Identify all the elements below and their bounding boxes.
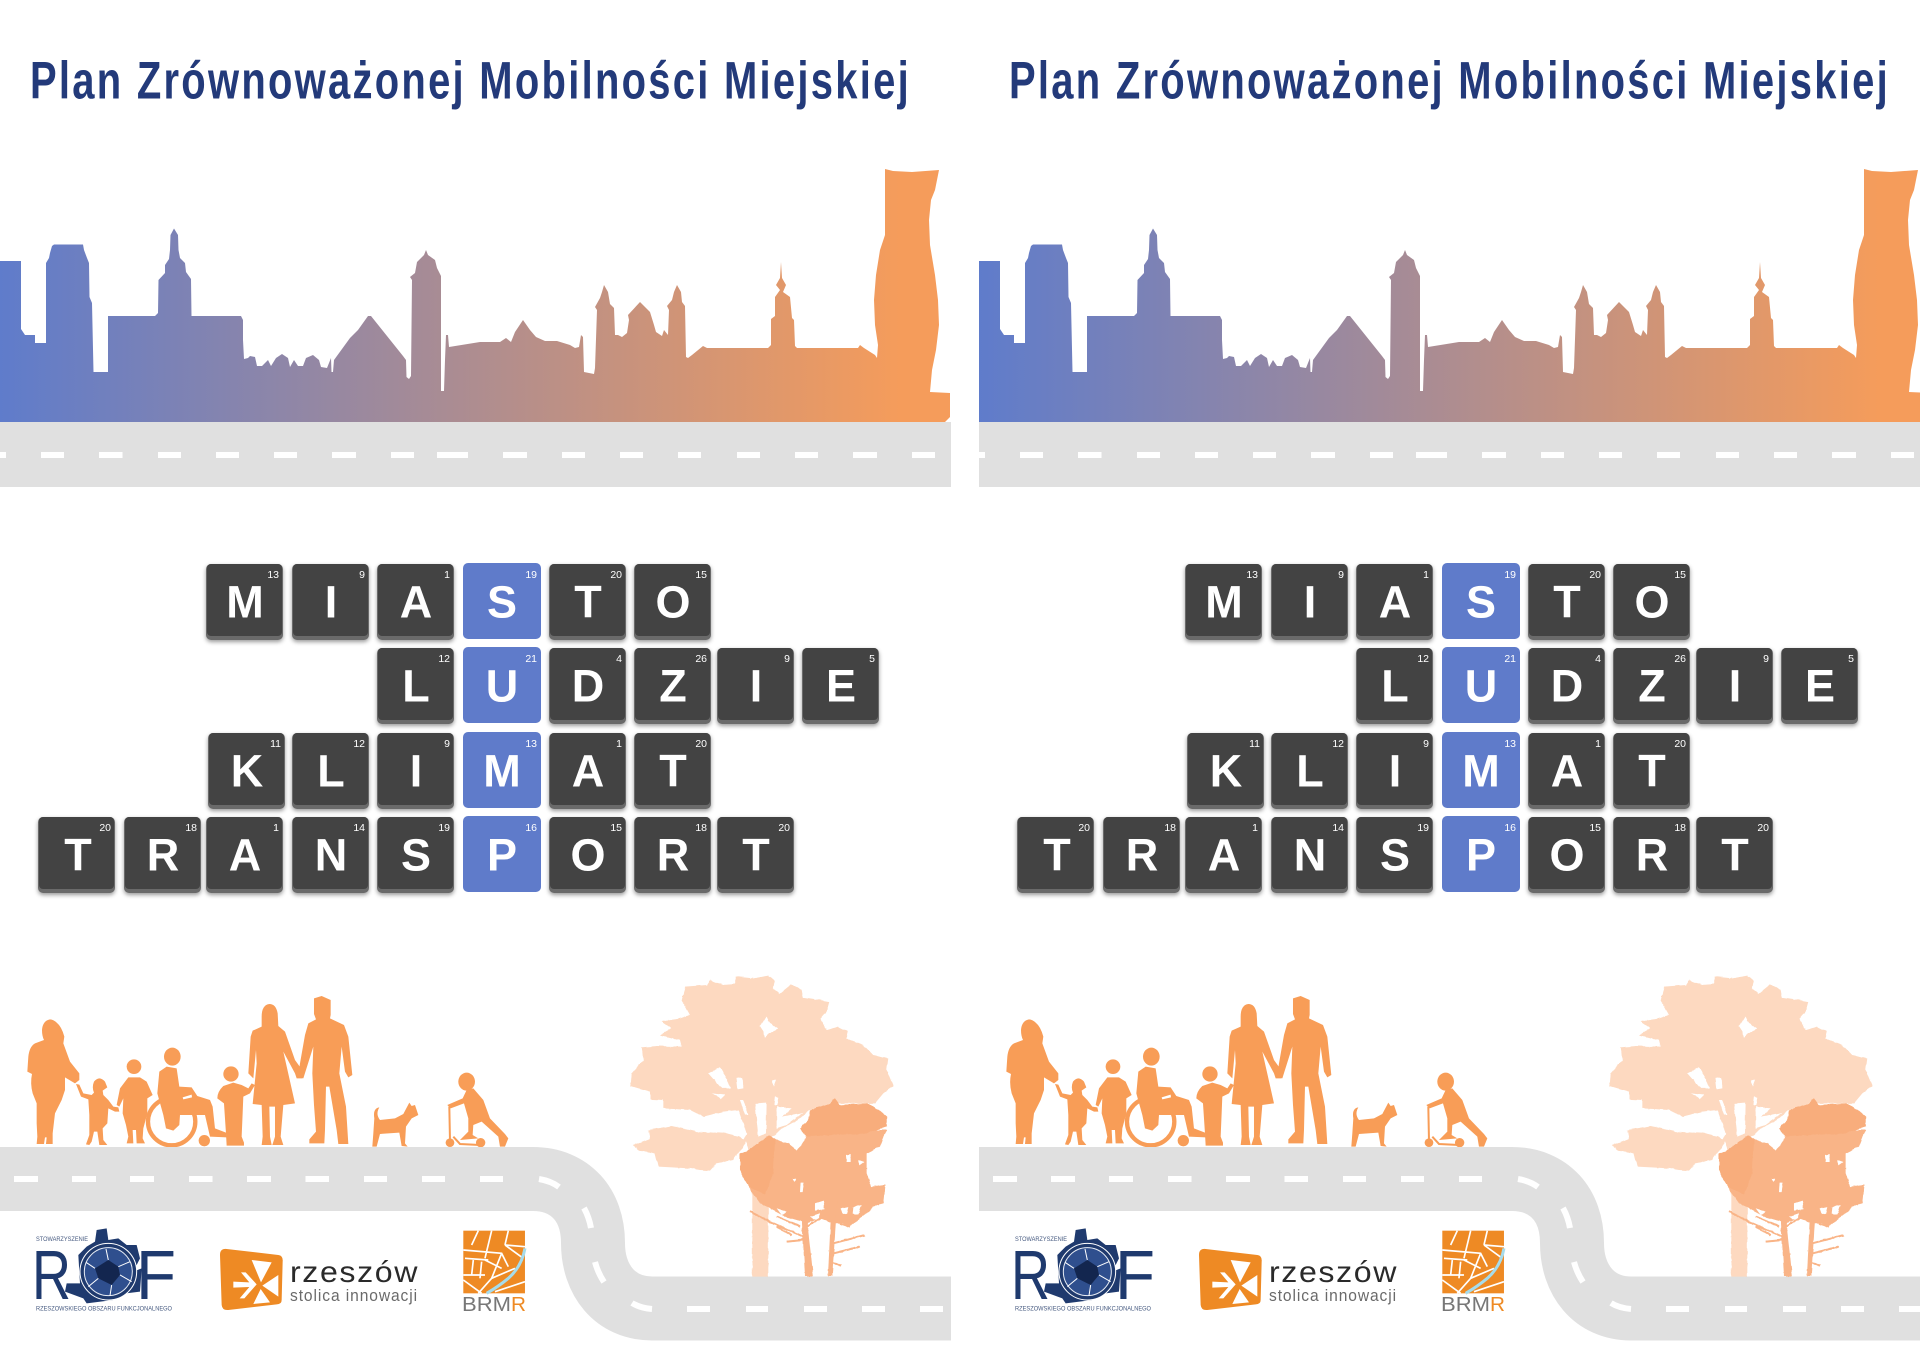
word: LUDZIE: D <box>572 660 604 712</box>
word: MIASTO: M <box>226 576 264 628</box>
word tiles: SUMP crossword <box>38 563 879 893</box>
trees <box>631 976 893 1277</box>
people silhouettes <box>1006 996 1487 1147</box>
word: TRANSPORT: 18 <box>1164 822 1176 834</box>
upper road with dashes <box>0 422 951 487</box>
city skyline silhouette <box>0 169 950 422</box>
word: MIASTO: S <box>1466 576 1496 628</box>
word: MIASTO: 13 <box>267 569 279 581</box>
word: KLIMAT: 13 <box>525 738 537 750</box>
logo: ROF: STOWARZYSZENIE <box>36 1236 89 1243</box>
word: MIASTO: 15 <box>1674 569 1686 581</box>
title: Plan Zrównoważonej Mobilności Miejskiej <box>30 52 911 110</box>
word: KLIMAT: 11 <box>1249 738 1260 750</box>
word: MIASTO: 13 <box>1246 569 1258 581</box>
word: TRANSPORT: T <box>742 830 770 880</box>
word: KLIMAT: K <box>231 746 264 796</box>
word: MIASTO <box>206 563 711 640</box>
logo: ROF: STOWARZYSZENIE <box>1015 1236 1068 1243</box>
word: LUDZIE: 21 <box>525 653 537 665</box>
logo: ROF: F <box>136 1236 176 1314</box>
word: TRANSPORT: 18 <box>1674 822 1686 834</box>
word: MIASTO: I <box>1304 576 1316 628</box>
logo: ROF: R <box>1011 1236 1050 1314</box>
word: TRANSPORT: A <box>229 830 261 880</box>
word: LUDZIE <box>377 647 879 724</box>
logo: Rzeszów: rzeszów <box>290 1256 419 1289</box>
word: KLIMAT <box>1187 732 1690 809</box>
word: MIASTO: 20 <box>1589 569 1601 581</box>
word: KLIMAT: M <box>483 746 521 796</box>
logo: BRMR <box>462 1231 526 1316</box>
word: MIASTO: 15 <box>695 569 707 581</box>
logo: Rzeszów <box>220 1249 419 1310</box>
word: TRANSPORT: T <box>1043 830 1071 880</box>
word: TRANSPORT: R <box>1636 830 1668 880</box>
winding lower road <box>979 1176 1920 1312</box>
word: TRANSPORT: O <box>570 830 606 880</box>
word: TRANSPORT <box>38 816 794 893</box>
word: KLIMAT: 1 <box>616 738 622 750</box>
word: TRANSPORT: 20 <box>99 822 111 834</box>
word: MIASTO: 19 <box>525 569 537 581</box>
word: LUDZIE: E <box>1805 660 1835 712</box>
word: MIASTO: 19 <box>1504 569 1516 581</box>
word: MIASTO: 9 <box>1338 569 1344 581</box>
word: TRANSPORT: 16 <box>525 822 537 834</box>
word: KLIMAT: 1 <box>1595 738 1601 750</box>
logo: BRMR: R <box>511 1294 526 1316</box>
word: MIASTO: S <box>487 576 517 628</box>
word: KLIMAT: T <box>659 746 687 796</box>
word: LUDZIE: D <box>1551 660 1583 712</box>
word: TRANSPORT: 15 <box>610 822 622 834</box>
word: TRANSPORT: P <box>487 830 517 880</box>
panel: left leaflet <box>0 52 951 1316</box>
word: KLIMAT: I <box>410 746 422 796</box>
word: TRANSPORT: 20 <box>778 822 790 834</box>
word: TRANSPORT: T <box>64 830 92 880</box>
people silhouettes <box>27 996 508 1147</box>
word: TRANSPORT: 16 <box>1504 822 1516 834</box>
word: KLIMAT: I <box>1389 746 1401 796</box>
word: TRANSPORT: P <box>1466 830 1496 880</box>
word: KLIMAT: K <box>1210 746 1243 796</box>
trees <box>1610 976 1872 1277</box>
word: KLIMAT: 20 <box>1674 738 1686 750</box>
word: MIASTO: A <box>1379 576 1411 628</box>
word: LUDZIE: E <box>826 660 856 712</box>
panel: right leaflet <box>979 52 1920 1316</box>
word: TRANSPORT: R <box>657 830 689 880</box>
word: TRANSPORT: 18 <box>695 822 707 834</box>
word: TRANSPORT: 20 <box>1078 822 1090 834</box>
word: TRANSPORT: T <box>1721 830 1749 880</box>
word: LUDZIE: 4 <box>1595 653 1601 665</box>
word: MIASTO: 1 <box>444 569 450 581</box>
word: LUDZIE: U <box>1465 660 1497 712</box>
word: LUDZIE: 5 <box>1848 653 1854 665</box>
word: LUDZIE <box>1356 647 1858 724</box>
word: KLIMAT: 11 <box>270 738 281 750</box>
word: TRANSPORT: 1 <box>1252 822 1258 834</box>
word: LUDZIE: I <box>1729 660 1741 712</box>
word: TRANSPORT <box>1017 816 1773 893</box>
word: TRANSPORT: 14 <box>1332 822 1344 834</box>
word: KLIMAT: 20 <box>695 738 707 750</box>
word: LUDZIE: L <box>1381 660 1409 712</box>
logo: ROF: R <box>32 1236 71 1314</box>
word: KLIMAT <box>208 732 711 809</box>
logo: ROF: F <box>1115 1236 1155 1314</box>
word: TRANSPORT: S <box>1380 830 1410 880</box>
word: MIASTO: A <box>400 576 432 628</box>
word: TRANSPORT: R <box>147 830 179 880</box>
word: TRANSPORT: O <box>1549 830 1585 880</box>
word: KLIMAT: T <box>1638 746 1666 796</box>
word: TRANSPORT: 18 <box>185 822 197 834</box>
word: LUDZIE: 9 <box>784 653 790 665</box>
word: MIASTO: 9 <box>359 569 365 581</box>
logo: BRMR <box>1441 1231 1505 1316</box>
word: TRANSPORT: 15 <box>1589 822 1601 834</box>
word: KLIMAT: L <box>1296 746 1324 796</box>
word: MIASTO: M <box>1205 576 1243 628</box>
word: KLIMAT: A <box>1551 746 1583 796</box>
word: LUDZIE: 5 <box>869 653 875 665</box>
word: LUDZIE: Z <box>659 660 687 712</box>
word: LUDZIE: 26 <box>1674 653 1686 665</box>
logo: BRMR: BRM <box>1441 1294 1490 1316</box>
word: LUDZIE: 21 <box>1504 653 1516 665</box>
logo: ROF: RZESZOWSKIEGO OBSZARU FUNKCJONALNEGO <box>36 1306 172 1312</box>
city skyline silhouette <box>979 169 1920 422</box>
logo: ROF <box>1011 1228 1155 1314</box>
word: TRANSPORT: 19 <box>1417 822 1429 834</box>
word: TRANSPORT: 14 <box>353 822 365 834</box>
word: TRANSPORT: 20 <box>1757 822 1769 834</box>
word: LUDZIE: 4 <box>616 653 622 665</box>
word: TRANSPORT: N <box>315 830 347 880</box>
word: MIASTO: I <box>325 576 337 628</box>
logo: BRMR: BRM <box>462 1294 511 1316</box>
winding lower road <box>0 1176 951 1312</box>
word: TRANSPORT: A <box>1208 830 1240 880</box>
word: MIASTO: O <box>1634 576 1670 628</box>
word: TRANSPORT: 19 <box>438 822 450 834</box>
word: KLIMAT: L <box>317 746 345 796</box>
logo: BRMR: R <box>1490 1294 1505 1316</box>
word: MIASTO: 1 <box>1423 569 1429 581</box>
word: KLIMAT: 13 <box>1504 738 1516 750</box>
word: KLIMAT: 12 <box>353 738 365 750</box>
word: TRANSPORT: S <box>401 830 431 880</box>
upper road with dashes <box>979 422 1920 487</box>
logo: ROF <box>32 1228 176 1314</box>
word: KLIMAT: A <box>572 746 604 796</box>
word: MIASTO: 20 <box>610 569 622 581</box>
word: KLIMAT: 12 <box>1332 738 1344 750</box>
logo: Rzeszów <box>1199 1249 1398 1310</box>
word: KLIMAT: 9 <box>1423 738 1429 750</box>
word: MIASTO: O <box>655 576 691 628</box>
word: LUDZIE: 9 <box>1763 653 1769 665</box>
word: TRANSPORT: R <box>1126 830 1158 880</box>
word: LUDZIE: Z <box>1638 660 1666 712</box>
word: KLIMAT: 9 <box>444 738 450 750</box>
word: MIASTO <box>1185 563 1690 640</box>
logo: Rzeszów: rzeszów <box>1269 1256 1398 1289</box>
word: KLIMAT: M <box>1462 746 1500 796</box>
logo: Rzeszów: stolica innowacji <box>290 1286 418 1305</box>
word: TRANSPORT: 1 <box>273 822 279 834</box>
word: LUDZIE: 26 <box>695 653 707 665</box>
word: LUDZIE: U <box>486 660 518 712</box>
logo: ROF: RZESZOWSKIEGO OBSZARU FUNKCJONALNEGO <box>1015 1306 1151 1312</box>
word: MIASTO: T <box>1553 576 1581 628</box>
logo: Rzeszów: stolica innowacji <box>1269 1286 1397 1305</box>
word tiles: SUMP crossword <box>1017 563 1858 893</box>
word: LUDZIE: I <box>750 660 762 712</box>
word: LUDZIE: 12 <box>1417 653 1429 665</box>
word: MIASTO: T <box>574 576 602 628</box>
word: LUDZIE: L <box>402 660 430 712</box>
word: TRANSPORT: N <box>1294 830 1326 880</box>
word: LUDZIE: 12 <box>438 653 450 665</box>
